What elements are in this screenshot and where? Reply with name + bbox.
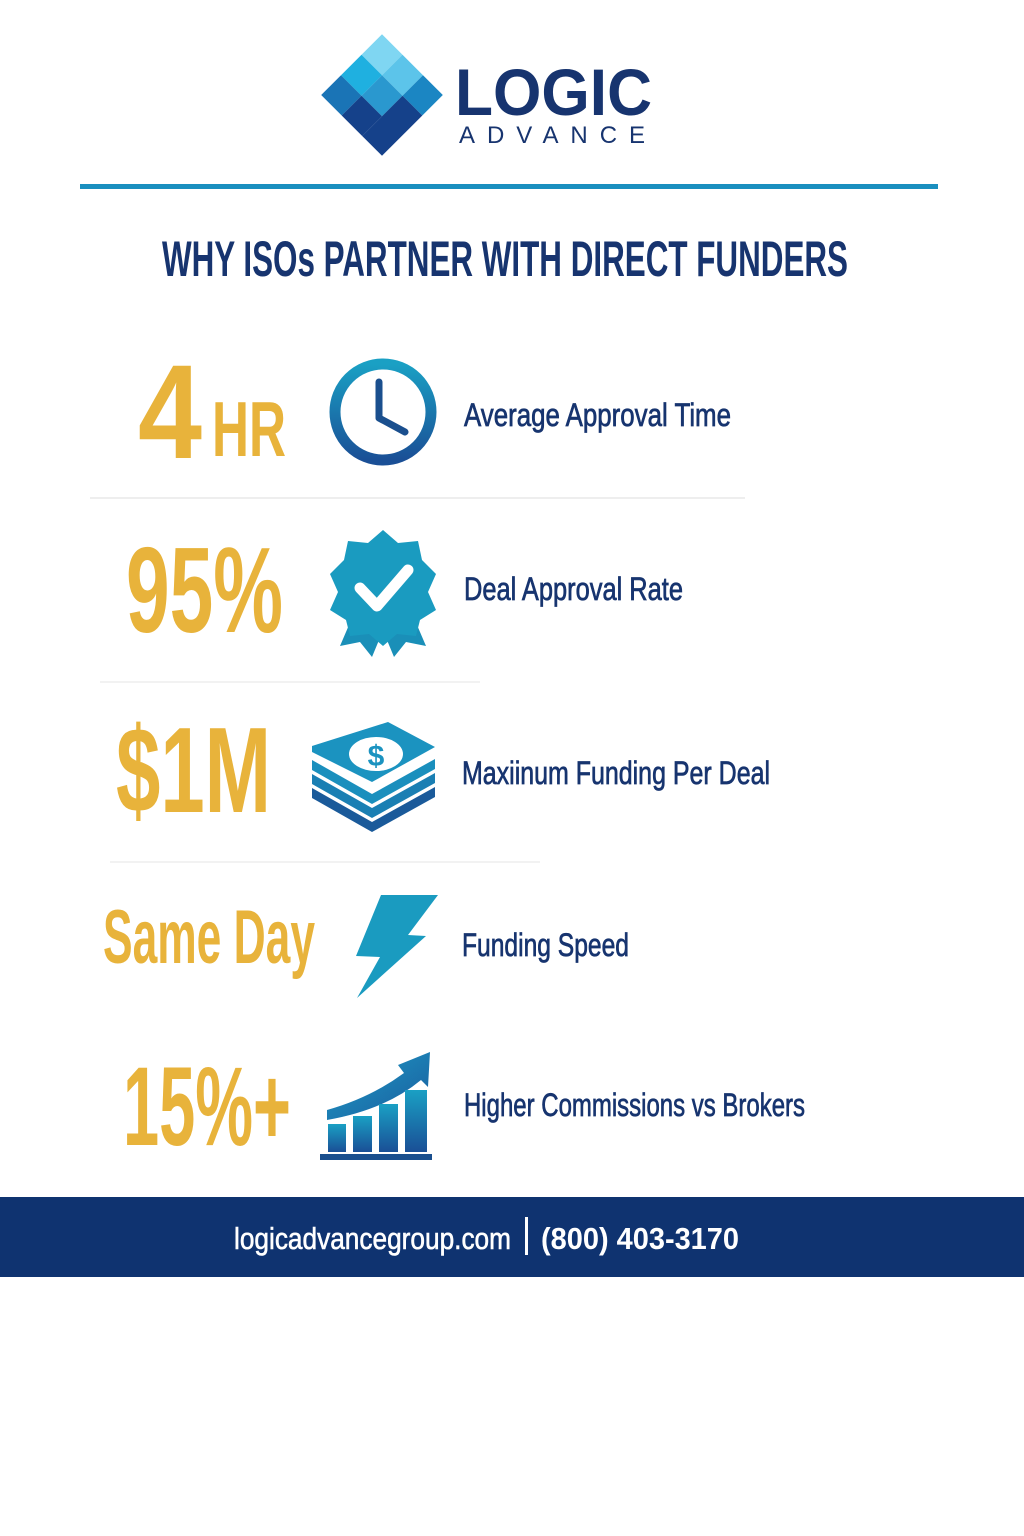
row: approval rate (126, 522, 683, 658)
label: Higher Commissions vs Brokers (464, 1087, 805, 1123)
footer band (0, 1197, 1024, 1277)
footer band: logicadvancegroup.com (234, 1221, 511, 1256)
icon: growth chart (320, 1052, 432, 1160)
row: approval time: HR (212, 385, 286, 473)
icon: clock (335, 364, 431, 460)
logo (321, 34, 652, 156)
stat: Same Day: Same Day (103, 895, 315, 980)
footer band: (800) 403-3170 (541, 1221, 739, 1256)
icon: logo diamond (321, 34, 443, 156)
stat: 95%: 95% (126, 522, 283, 658)
row: commissions (123, 1044, 805, 1169)
row: approval time (138, 338, 731, 487)
logo text: LOGIC (455, 55, 652, 129)
icon: badge (330, 530, 436, 657)
label: Average Approval Time (464, 397, 731, 433)
stat: 15%+: 15%+ (123, 1044, 291, 1169)
label: Funding Speed (462, 927, 629, 963)
icon: money stack (312, 722, 435, 832)
label: Deal Approval Rate (464, 571, 683, 607)
row: funding speed (103, 895, 629, 998)
logo: ADVANCE (459, 122, 645, 149)
stat: $1M: $1M (116, 702, 271, 838)
label: Maxiinum Funding Per Deal (462, 755, 770, 791)
row: max funding (116, 702, 770, 838)
stat: 4 HR: 4 (138, 338, 202, 487)
icon: money stack: $ (368, 740, 385, 773)
icon: lightning bolt (356, 895, 438, 998)
